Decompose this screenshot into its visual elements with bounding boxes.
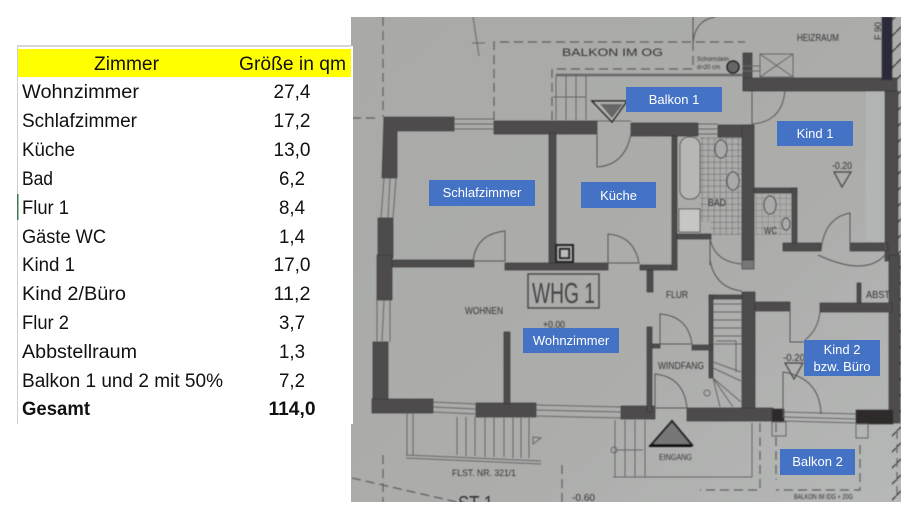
table rows: sizes: 114,0: [268, 399, 316, 420]
label: Balkon 1: [626, 87, 722, 112]
table header: Zimmer: [94, 54, 160, 75]
staircase: [704, 304, 742, 407]
icon: entrance triangle: [649, 421, 692, 446]
plan annotations: WOHNEN: [465, 306, 503, 317]
label: Schlafzimmer: [429, 180, 535, 206]
label: Wohnzimmer: Wohnzimmer: [533, 333, 610, 348]
plan annotations: F 90: [873, 22, 883, 40]
label: Kind 2 bzw. Büro: [804, 340, 880, 376]
plan annotations: -0.20: [783, 353, 805, 364]
table rows: sizes: 27,4: [274, 82, 311, 103]
table rows: room names: Schlafzimmer: [22, 111, 138, 132]
table rows: room names: Gäste WC: [22, 227, 106, 248]
outer and inner walls: [372, 17, 900, 424]
label: Küche: Küche: [600, 188, 637, 203]
table header: [18, 49, 351, 77]
plan annotations: BALKON IM IDG + 20G: [794, 494, 853, 501]
label: Kind 2 bzw. Büro: bzw. Büro: [813, 359, 871, 374]
table rows: room names: Abbstellraum: [22, 342, 137, 363]
icon: balcony triangle: [592, 101, 627, 122]
label: Wohnzimmer: [523, 328, 619, 353]
label: Balkon 1: Balkon 1: [649, 92, 699, 107]
icon: inner chimney: [556, 245, 573, 262]
label: Kind 1: Kind 1: [797, 126, 833, 141]
bathroom fixtures: [679, 137, 742, 235]
upper balcony details: [472, 17, 793, 120]
plan annotations: Schornstein: [697, 57, 729, 63]
plan annotations: -0.60: [572, 493, 595, 504]
table rows: sizes: 1,4: [279, 227, 305, 248]
table rows: room names: [22, 82, 223, 420]
label: Küche: [581, 182, 656, 208]
table rows: room names: Wohnzimmer: [22, 82, 140, 103]
table rows: sizes: [268, 82, 316, 420]
plan annotations: [452, 22, 890, 515]
table header: Größe in qm: [239, 54, 346, 75]
bottom stairs and terrace: [406, 413, 868, 477]
plan annotations: +0.00: [543, 320, 565, 331]
plan annotations: WC: [764, 226, 777, 237]
label: Balkon 2: [780, 449, 855, 475]
table rows: sizes: 7,2: [279, 371, 305, 392]
table rows: room names: Gesamt: [22, 399, 91, 420]
table rows: room names: Kind 1: [22, 255, 75, 276]
icon: chimney circle: [727, 61, 739, 73]
label: Kind 1: [777, 121, 853, 146]
table rows: room names: Bad: [22, 169, 53, 190]
table rows: sizes: 6,2: [279, 169, 305, 190]
table rows: room names: Flur 1: [22, 198, 69, 219]
table rows: room names: Küche: [22, 140, 75, 161]
table rows: sizes: 8,4: [279, 198, 305, 219]
windows: [377, 119, 856, 423]
table rows: sizes: 13,0: [274, 140, 310, 161]
plan annotations: FLST. NR. 321/1: [452, 468, 516, 478]
table rows: sizes: 11,2: [274, 284, 310, 305]
balcony dashed outlines: [352, 17, 897, 505]
lighter strip near right wall: [866, 91, 886, 241]
WHG 1 box: [528, 274, 599, 310]
table rows: room names: Flur 2: [22, 313, 69, 334]
plan annotations: d=20 cm: [697, 65, 720, 71]
plan annotations: -0.20: [832, 161, 852, 172]
WHG 1 box: WHG 1: [532, 278, 595, 310]
level triangles: [785, 172, 851, 379]
door arcs: [473, 17, 885, 418]
table: room sizes: [17, 46, 353, 424]
plan annotations: ST 1: [458, 493, 493, 515]
plan annotations: BAD: [708, 198, 726, 209]
label: Schlafzimmer: Schlafzimmer: [443, 185, 522, 200]
guest wc fixtures: [755, 193, 792, 235]
plan annotations: WINDFANG: [658, 361, 704, 372]
label: Balkon 2: Balkon 2: [792, 454, 843, 469]
table rows: sizes: 17,0: [274, 255, 310, 276]
label: Kind 2 bzw. Büro: Kind 2: [824, 342, 860, 357]
plan annotations: EINGANG: [659, 453, 692, 462]
table rows: sizes: 1,3: [279, 342, 305, 363]
plan annotations: HEIZRAUM: [797, 33, 839, 44]
plan drawing: [352, 17, 901, 515]
table rows: room names: Balkon 1 und 2 mit 50%: [22, 371, 223, 392]
table rows: room names: Kind 2/Büro: [22, 284, 126, 305]
table rows: sizes: 17,2: [274, 111, 310, 132]
floor plan photo: [351, 17, 901, 515]
table rows: sizes: 3,7: [279, 313, 305, 334]
plan annotations: ABST: [866, 290, 890, 301]
plan annotations: BALKON IM OG: [562, 47, 663, 59]
plan annotations: FLUR: [666, 290, 688, 301]
